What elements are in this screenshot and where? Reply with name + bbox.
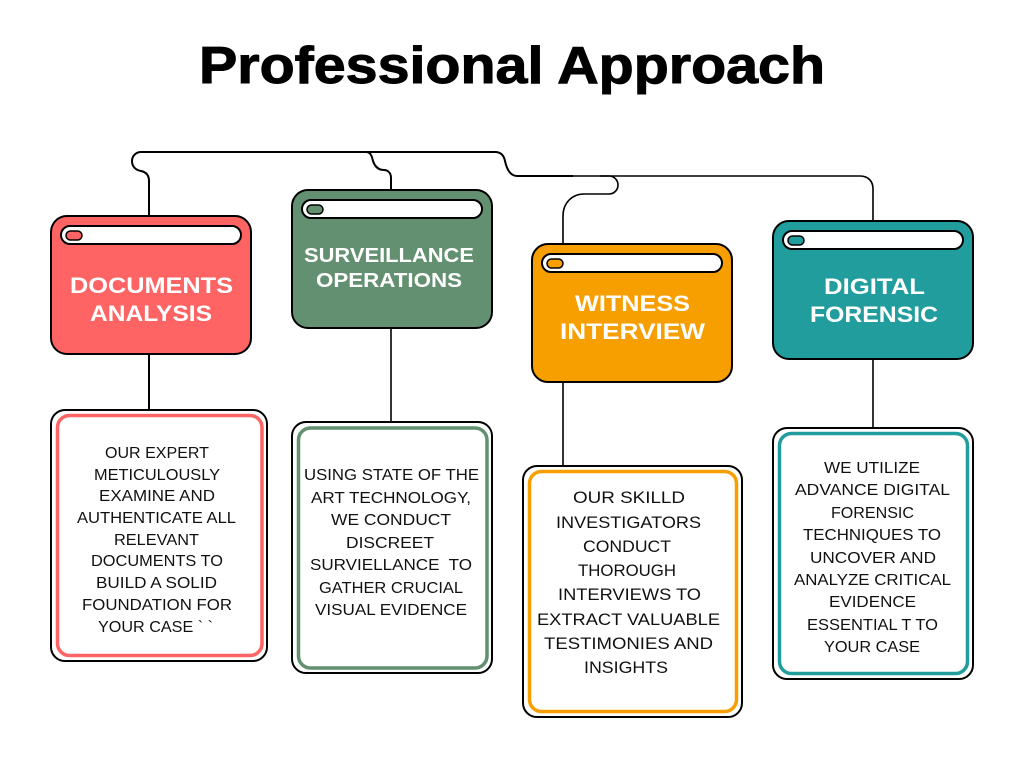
panel: surveillance operations description — [292, 422, 492, 673]
panel: documents analysis description: METICULOUSLY — [94, 467, 220, 484]
panel: documents analysis description: OUR EXPERT — [105, 445, 210, 462]
panel: surveillance operations header: SURVEILLANCE — [304, 245, 474, 267]
panel: witness interview description: EXTRACT VALUABLE — [537, 610, 720, 629]
panel: documents analysis description — [51, 410, 267, 661]
panel: documents analysis description: YOUR CASE ` ` — [98, 619, 213, 636]
panel: digital forensic description: EVIDENCE — [829, 594, 916, 611]
panel: surveillance operations description: WE CONDUCT — [331, 512, 451, 529]
panel: surveillance operations description: GATHER CRUCIAL — [319, 580, 463, 597]
panel: witness interview description: INVESTIGATORS — [556, 513, 701, 532]
panel: documents analysis header: DOCUMENTS — [70, 273, 233, 298]
panel: documents analysis description: BUILD A SOLID — [96, 575, 217, 592]
panel: digital forensic description — [773, 428, 973, 679]
panel: documents analysis description: DOCUMENTS TO — [91, 553, 223, 570]
panel: witness interview description: CONDUCT — [583, 537, 671, 556]
panel: documents analysis header: ANALYSIS — [90, 301, 212, 326]
panel: surveillance operations description: DISCREET — [346, 535, 434, 552]
panel: documents analysis description: AUTHENTICATE ALL — [77, 510, 236, 527]
panel: digital forensic description: FORENSIC — [831, 505, 914, 522]
panel: surveillance operations header: OPERATIONS — [316, 270, 462, 292]
panel: digital forensic description: UNCOVER AND — [810, 550, 936, 567]
panel: documents analysis description: RELEVANT — [114, 532, 200, 549]
title: Professional Approach — [199, 37, 825, 95]
panel: digital forensic description: ADVANCE DIGITAL — [795, 482, 950, 499]
panel: surveillance operations description: USING STATE OF THE — [304, 467, 479, 484]
panel: witness interview description — [523, 466, 742, 717]
panel: digital forensic description: YOUR CASE — [824, 639, 920, 656]
panel: documents analysis description: EXAMINE AND — [99, 488, 215, 505]
panel: digital forensic description: TECHNIQUES TO — [803, 527, 941, 544]
panel: surveillance operations description: SURVIELLANCE TO — [310, 557, 472, 574]
panel: witness interview header: WITNESS — [575, 291, 690, 316]
panel: digital forensic description: WE UTILIZE — [824, 460, 920, 477]
panel: documents analysis description: FOUNDATION FOR — [82, 597, 232, 614]
panel: digital forensic header: DIGITAL — [824, 274, 925, 299]
connector network — [132, 152, 873, 466]
panel: digital forensic description: ESSENTIAL T TO — [807, 617, 938, 634]
panel: witness interview description: TESTIMONIES AND — [544, 634, 713, 653]
panel: witness interview header: INTERVIEW — [560, 319, 705, 344]
panel: witness interview description: THOROUGH — [578, 561, 676, 580]
panel: digital forensic header — [773, 221, 973, 359]
panel: witness interview description: OUR SKILLD — [573, 488, 685, 507]
panel: digital forensic header: FORENSIC — [810, 302, 938, 327]
panel: surveillance operations description: VISUAL EVIDENCE — [315, 602, 467, 619]
panel: surveillance operations header — [292, 190, 492, 328]
panel: witness interview header — [532, 244, 732, 382]
panel: witness interview description: INTERVIEWS TO — [558, 585, 701, 604]
panel: digital forensic description: ANALYZE CRITICAL — [794, 572, 951, 589]
panel: surveillance operations description: ART TECHNOLOGY, — [311, 490, 471, 507]
panel: documents analysis header — [51, 216, 251, 354]
panel: witness interview description: INSIGHTS — [584, 658, 668, 677]
